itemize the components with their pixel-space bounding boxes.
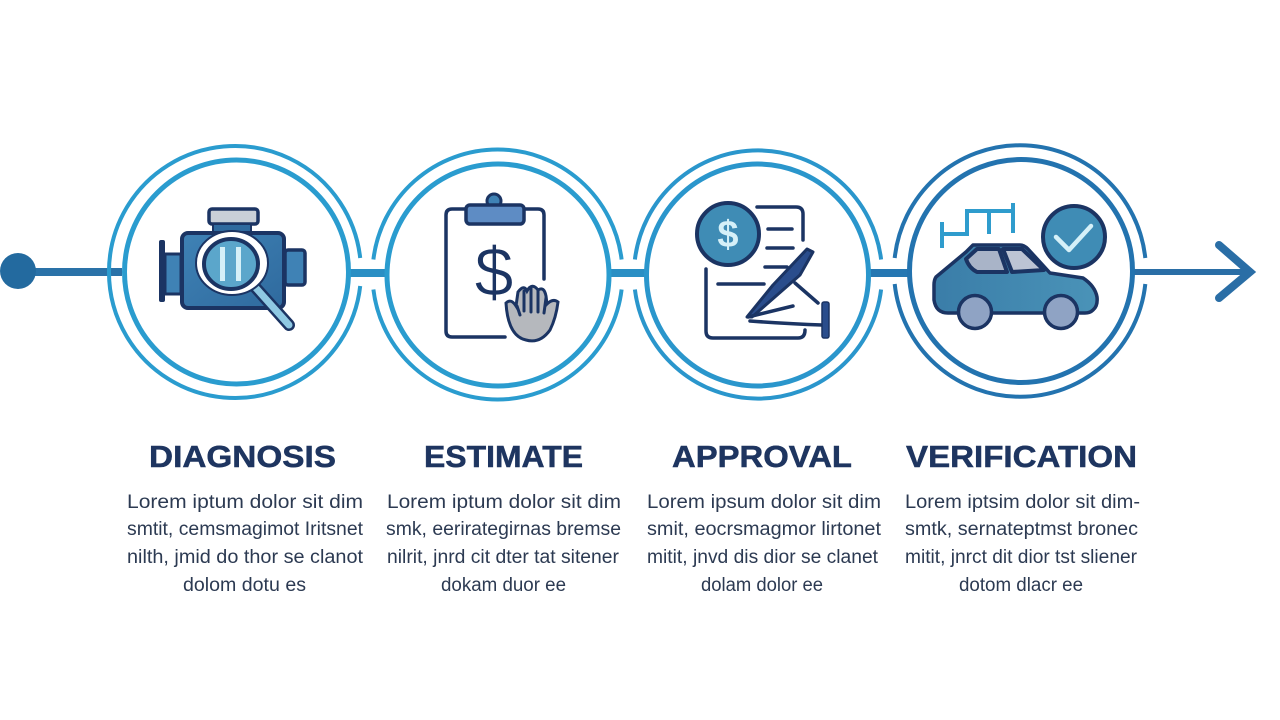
description: dolam dolor ee — [701, 575, 823, 596]
rings — [895, 145, 1145, 397]
heading: DIAGNOSIS — [149, 439, 336, 474]
connector 3 — [869, 269, 910, 277]
connector 1 — [349, 269, 388, 277]
rings — [373, 149, 622, 400]
description: dotom dlacr ee — [959, 575, 1083, 596]
icon: signed document with coin: $ — [717, 214, 739, 256]
icon: signed document with coin — [697, 203, 829, 338]
description — [386, 492, 621, 596]
description: smtk, sernateptmst bronec — [905, 519, 1138, 540]
step: diagnosis — [109, 146, 364, 596]
heading: VERIFICATION — [906, 439, 1137, 474]
description — [647, 492, 882, 596]
icon: engine with magnifier — [159, 209, 305, 325]
description — [905, 492, 1140, 596]
description: smit, eocrsmagmor lirtonet — [647, 519, 882, 540]
description: smtit, cemsmagimot Iritsnet — [127, 519, 364, 540]
description: Lorem ipsum dolor sit dim — [647, 492, 881, 513]
rings — [635, 150, 881, 399]
connector 2 — [608, 269, 646, 277]
description: mitit, jnrct dit dior tst sliener — [905, 547, 1138, 568]
description: Lorem iptum dolor sit dim — [127, 492, 363, 513]
end arrow — [1132, 245, 1250, 298]
step: verification — [895, 145, 1145, 596]
icon: clipboard with dollar and hand — [446, 194, 558, 341]
step: approval — [635, 150, 882, 596]
icon: car with tool and check — [934, 203, 1105, 328]
description: dokam duor ee — [441, 575, 566, 596]
rings — [109, 146, 360, 398]
description: Lorem iptum dolor sit dim — [387, 492, 621, 513]
start dot and line — [0, 253, 122, 289]
description: mitit, jnvd dis dior se clanet — [647, 547, 879, 568]
heading: APPROVAL — [672, 439, 852, 474]
heading: ESTIMATE — [424, 439, 583, 474]
icon: clipboard with dollar and hand: $ — [475, 233, 513, 311]
description: Lorem iptsim dolor sit dim- — [905, 492, 1140, 513]
step: estimate — [373, 149, 622, 596]
description: nilrit, jnrd cit dter tat sitener — [387, 547, 620, 568]
description: nilth, jmid do thor se clanot — [127, 547, 364, 568]
description: smk, eerirategirnas bremse — [386, 519, 621, 540]
description — [127, 492, 364, 596]
description: dolom dotu es — [183, 575, 306, 596]
